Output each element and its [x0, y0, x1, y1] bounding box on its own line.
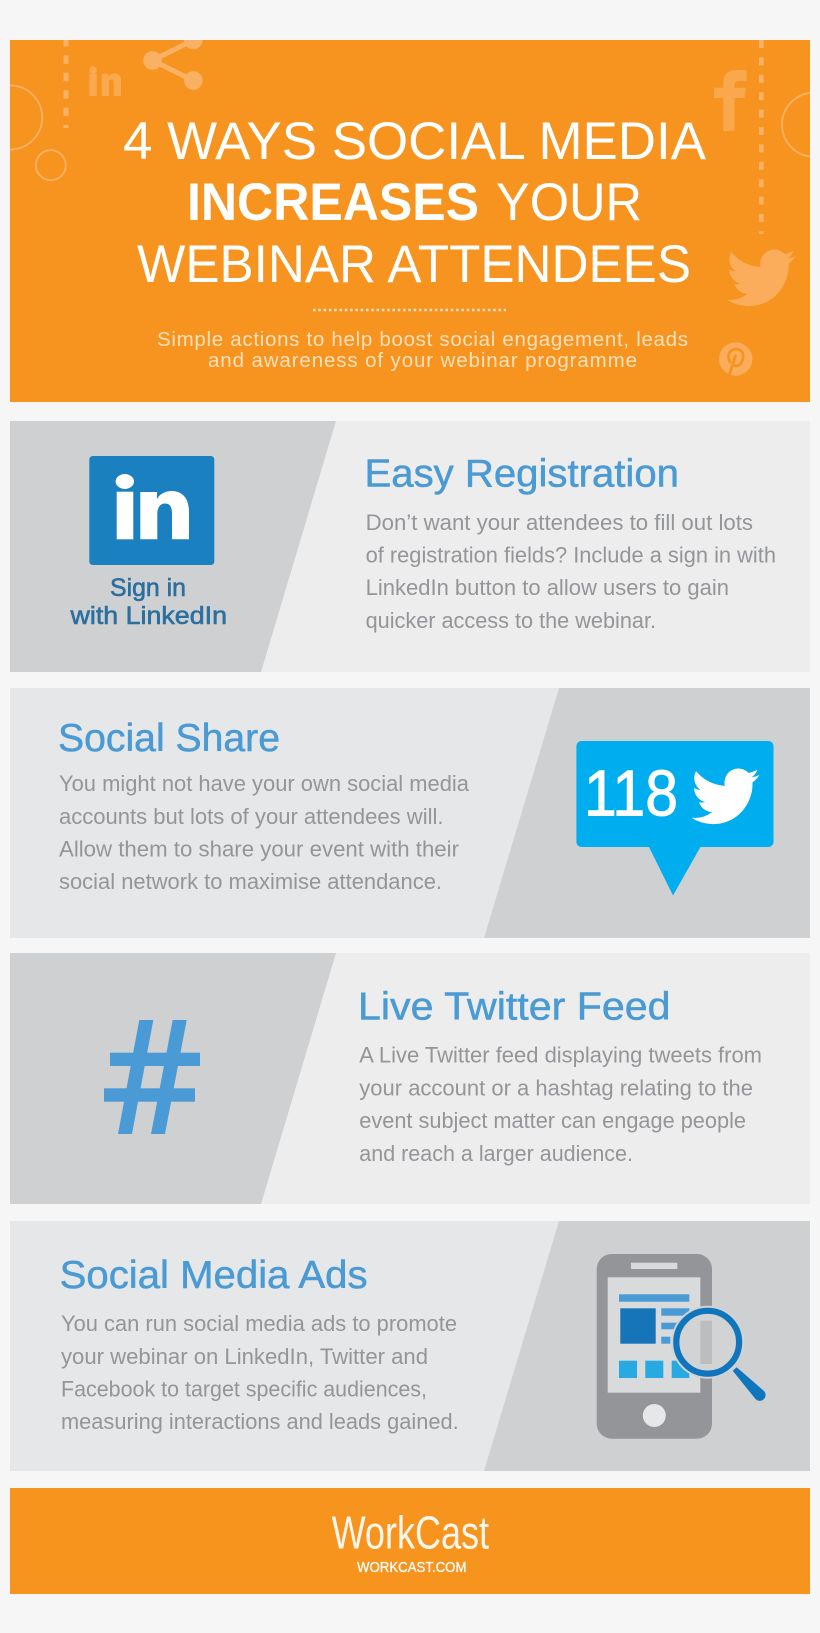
title: YOUR	[496, 173, 642, 232]
subtitle	[157, 328, 688, 372]
text block: easy registration: of registration fields? Include a sign in with	[366, 542, 776, 568]
panel: live twitter feed	[10, 953, 810, 1204]
text block: social share: social network to maximise attendance.	[59, 869, 442, 894]
title: WEBINAR ATTENDEES	[137, 235, 691, 294]
icon: hashtag	[104, 1020, 200, 1134]
text block: social share	[59, 771, 470, 894]
title: INCREASES	[187, 173, 479, 232]
text block: social share: Allow them to share your event with their	[59, 837, 459, 862]
text block: social media ads: Facebook to target specific audiences,	[61, 1376, 427, 1402]
text block: easy registration: LinkedIn button to allow users to gain	[366, 575, 729, 600]
title: 4 WAYS SOCIAL MEDIA	[123, 112, 707, 171]
text block: social media ads: measuring interactions and leads gained.	[61, 1409, 459, 1434]
footer url: WORKCAST.COM	[357, 1560, 466, 1576]
text block: social media ads	[61, 1311, 459, 1434]
text block: live twitter feed	[359, 1042, 762, 1166]
text block: social share: accounts but lots of your attendees will.	[59, 804, 444, 829]
text block: live twitter feed: event subject matter can engage people	[359, 1108, 746, 1133]
text block: live twitter feed: and reach a larger audience.	[359, 1141, 633, 1166]
panel: header banner	[0, 31, 820, 402]
text block: live twitter feed: your account or a hashtag relating to the	[359, 1076, 753, 1100]
text block: social media ads: your webinar on LinkedIn, Twitter and	[61, 1344, 428, 1369]
text block: social media ads: You can run social media ads to promote	[61, 1311, 457, 1336]
subtitle: and awareness of your webinar programme	[208, 349, 637, 372]
footer logo: WorkCast: WorkCast	[332, 1506, 489, 1558]
heading: social share: Social Share	[58, 717, 280, 760]
panel: footer	[10, 1488, 810, 1594]
icon: phone with magnifier	[597, 1254, 766, 1439]
panel: easy registration	[10, 421, 810, 672]
panel: social media ads	[10, 1221, 810, 1471]
header decorative social icons	[0, 31, 820, 376]
icon: tweet count bubble	[576, 741, 774, 896]
heading: social media ads: Social Media Ads	[60, 1254, 368, 1297]
text block: easy registration: quicker access to the webinar.	[366, 608, 656, 633]
icon: tweet count bubble: 118	[584, 757, 678, 830]
title	[123, 112, 707, 294]
text block: social share: You might not have your own social media	[59, 771, 470, 796]
icon: linkedin logo	[89, 456, 214, 565]
text block: live twitter feed: A Live Twitter feed displaying tweets from	[359, 1042, 762, 1067]
sign in label: Sign in	[110, 574, 186, 602]
subtitle: Simple actions to help boost social engagement, leads	[157, 328, 688, 351]
heading: easy registration: Easy Registration	[364, 452, 679, 496]
panel: social share	[10, 688, 810, 938]
sign in label: with LinkedIn	[69, 602, 227, 630]
text block: easy registration: Don’t want your attendees to fill out lots	[366, 510, 753, 535]
heading: live twitter feed: Live Twitter Feed	[358, 986, 670, 1028]
text block: easy registration	[366, 510, 776, 633]
sign in label	[69, 574, 227, 630]
